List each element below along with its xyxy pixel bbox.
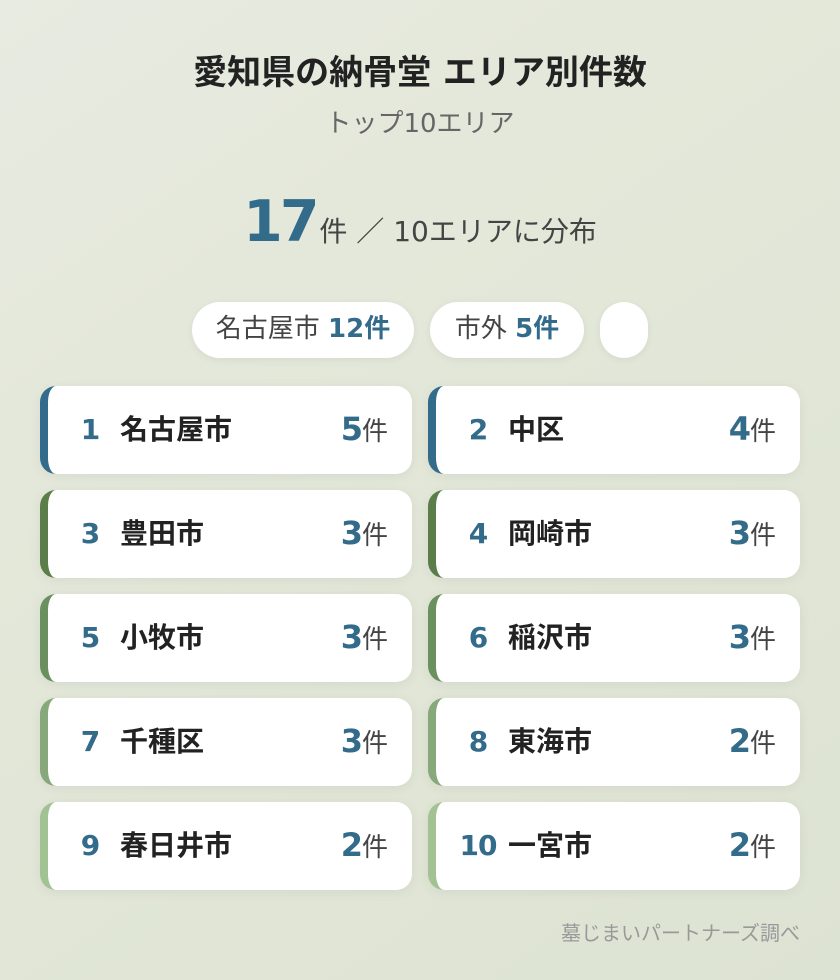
card: rank 6: 6 bbox=[469, 621, 487, 654]
card: rank 1: 1 bbox=[81, 413, 99, 446]
card: rank 5: 5 bbox=[81, 621, 99, 654]
card: rank 5: 小牧市 bbox=[120, 621, 204, 654]
card: rank 7: 7 bbox=[81, 725, 99, 758]
pill: outside city bbox=[430, 302, 584, 358]
card: rank 4: 4 bbox=[469, 517, 487, 550]
card: rank 6: 稲沢市 bbox=[508, 621, 592, 654]
summary total: 17 件 ／ 10エリアに分布 bbox=[243, 189, 597, 255]
card: rank 8: 2件 bbox=[729, 722, 776, 760]
subtitle: トップ10エリア bbox=[325, 109, 515, 139]
card: rank 2 bbox=[428, 386, 800, 474]
card: rank 3 bbox=[40, 490, 412, 578]
card: rank 4: 岡崎市 bbox=[508, 517, 592, 550]
card: rank 3: 3 bbox=[81, 517, 99, 550]
card: rank 7: 千種区 bbox=[120, 725, 204, 758]
card: rank 2: 中区 bbox=[508, 413, 564, 446]
title: 愛知県の納骨堂 エリア別件数 bbox=[193, 53, 647, 93]
card: rank 10 bbox=[428, 802, 800, 890]
pill: empty bbox=[600, 302, 648, 358]
card: rank 5 bbox=[40, 594, 412, 682]
card: rank 3: 豊田市 bbox=[120, 517, 204, 550]
card: rank 7: 3件 bbox=[341, 722, 388, 760]
card: rank 9: 9 bbox=[81, 829, 99, 862]
card: rank 2: 2 bbox=[469, 413, 487, 446]
card: rank 3: 3件 bbox=[341, 514, 388, 552]
card: rank 10: 10 bbox=[460, 829, 496, 862]
card: rank 9: 2件 bbox=[341, 826, 388, 864]
card: rank 8: 8 bbox=[469, 725, 487, 758]
card: rank 8 bbox=[428, 698, 800, 786]
card: rank 1: 名古屋市 bbox=[120, 413, 232, 446]
card: rank 10: 一宮市 bbox=[508, 829, 592, 862]
pill: Nagoya city: 名古屋市 12件 bbox=[216, 314, 390, 344]
card: rank 10: 2件 bbox=[729, 826, 776, 864]
card: rank 9 bbox=[40, 802, 412, 890]
pill: outside city: 市外 5件 bbox=[455, 314, 559, 344]
card: rank 4 bbox=[428, 490, 800, 578]
card: rank 7 bbox=[40, 698, 412, 786]
card: rank 5: 3件 bbox=[341, 618, 388, 656]
card: rank 1 bbox=[40, 386, 412, 474]
card: rank 6: 3件 bbox=[729, 618, 776, 656]
card: rank 4: 3件 bbox=[729, 514, 776, 552]
pill: Nagoya city bbox=[192, 302, 414, 358]
card: rank 1: 5件 bbox=[341, 410, 388, 448]
card: rank 6 bbox=[428, 594, 800, 682]
card: rank 2: 4件 bbox=[729, 410, 776, 448]
source note: 墓じまいパートナーズ調べ bbox=[561, 921, 800, 945]
card: rank 8: 東海市 bbox=[508, 725, 592, 758]
card: rank 9: 春日井市 bbox=[120, 829, 232, 862]
